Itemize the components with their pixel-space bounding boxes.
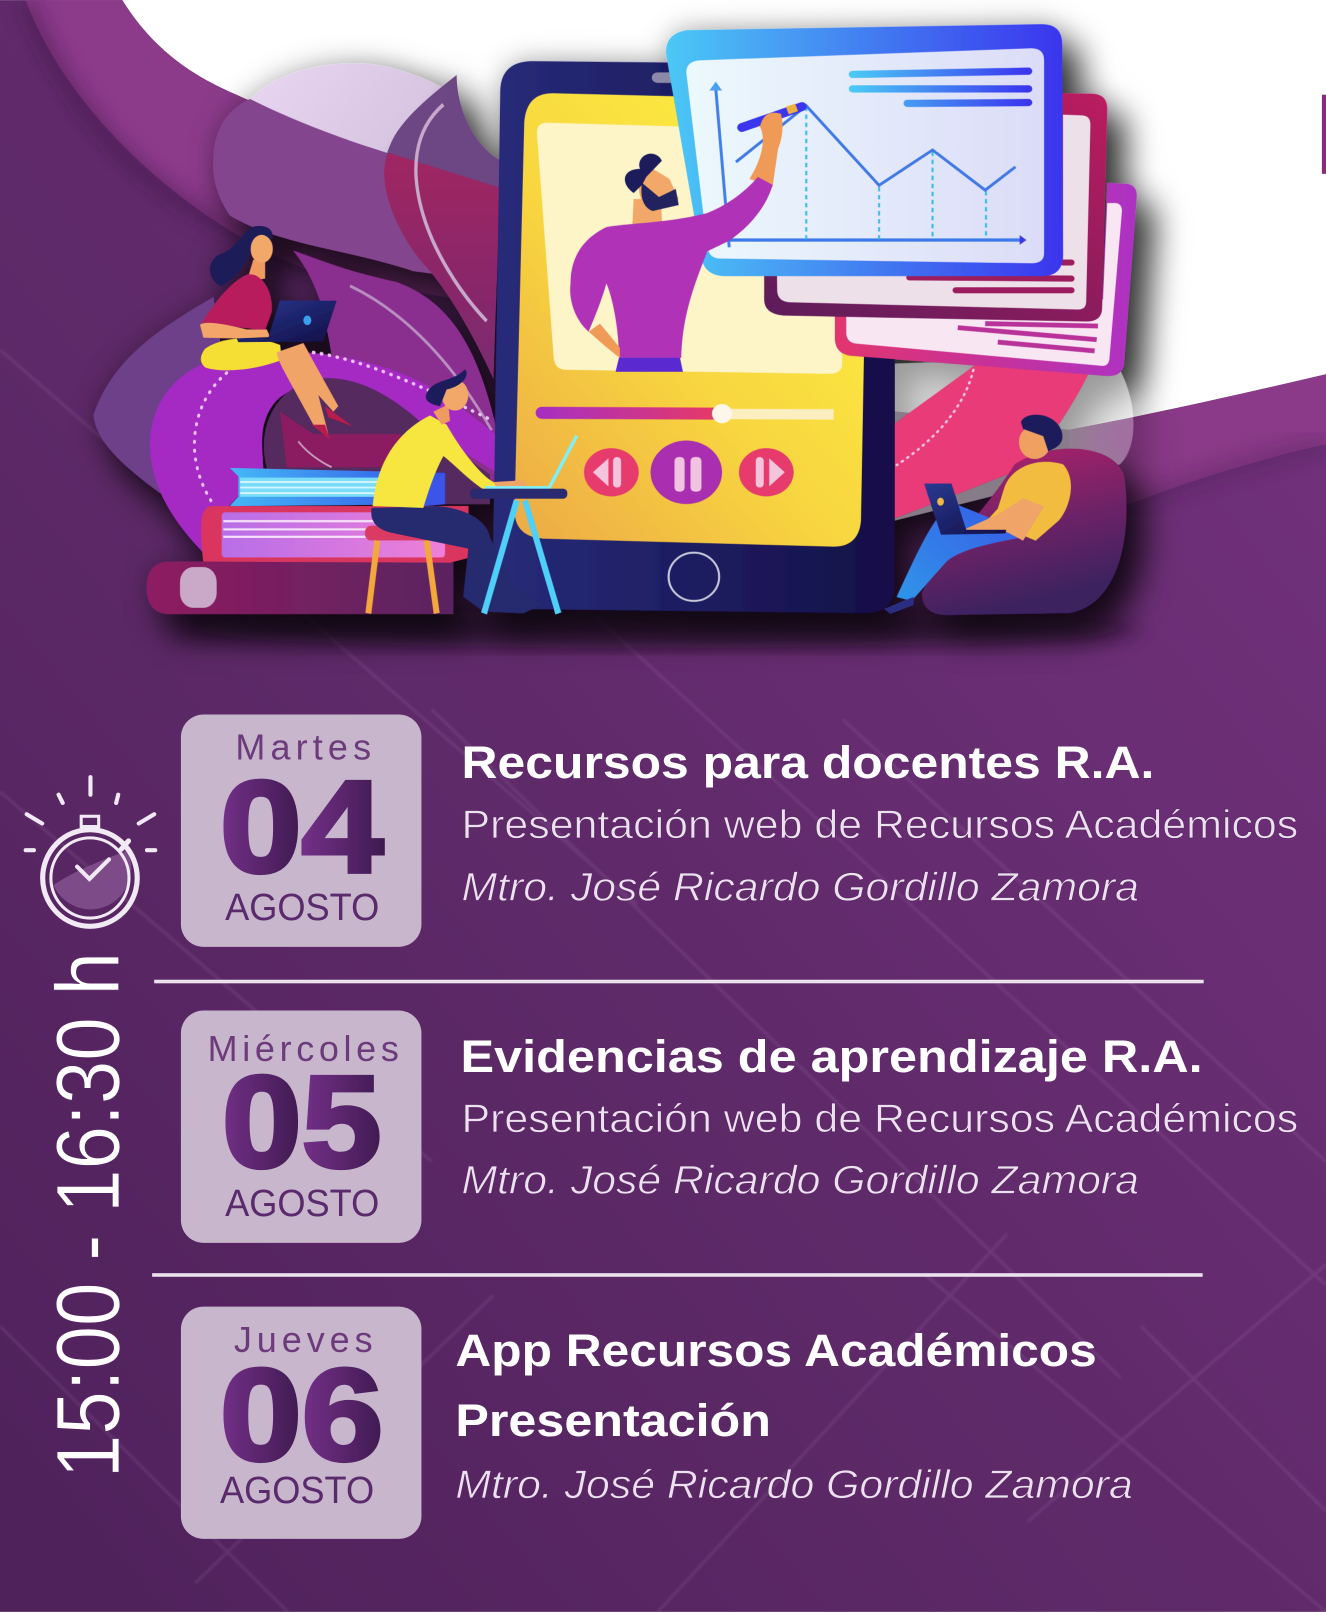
blue chart slide (666, 24, 1063, 276)
hand (493, 480, 527, 488)
session 2: date card: AGOSTO (225, 1183, 379, 1225)
top book (230, 468, 445, 506)
marker pen (742, 107, 802, 127)
session 1: date card: AGOSTO (225, 887, 379, 929)
background leaves and shapes (93, 63, 500, 556)
backpack (423, 473, 445, 506)
seated man (365, 369, 543, 613)
woman legs (277, 343, 338, 434)
pants (371, 506, 543, 613)
clock hands (77, 859, 109, 879)
case rings (43, 830, 137, 926)
woman shoes (312, 406, 353, 439)
woman laptop (237, 301, 337, 342)
session 1: date card: 04 (220, 754, 383, 900)
right-hand pink swoosh (895, 356, 1133, 521)
phone screen (515, 93, 868, 547)
ground shadow under illustration (175, 611, 1141, 648)
phone (493, 61, 895, 613)
shoe (884, 597, 914, 614)
slide 2 (764, 93, 1107, 322)
session 1: text (462, 737, 1298, 910)
hero illustration: video lesson on phone (93, 24, 1137, 615)
session 3: text: Mtro. José Ricardo Gordillo Zamora (455, 1463, 1133, 1507)
presenter neck and face (632, 165, 679, 225)
presenter hand on hip (589, 324, 620, 358)
hair (426, 369, 467, 406)
pause button (651, 441, 722, 504)
woman face and neck (247, 256, 265, 282)
session 3: text: App Recursos Académicos (455, 1325, 1097, 1376)
session 2: text: Presentación web de Recursos Académicos (462, 1097, 1298, 1141)
session 3: date card (181, 1307, 421, 1539)
video panel (537, 123, 842, 374)
session 3: date card: Jueves (234, 1319, 373, 1360)
session 2: date card (181, 1011, 421, 1243)
neck and head (433, 404, 450, 425)
text lines on slide (853, 71, 1029, 103)
vertical time label: 15:00 - 16:30 h (38, 952, 139, 1478)
book stack and front figures (147, 226, 577, 614)
session 1: text: Recursos para docentes R.A. (462, 737, 1154, 788)
man on beanbag with laptop (884, 415, 1126, 615)
hair (1021, 415, 1062, 451)
arm (966, 498, 1044, 541)
slide 3 (835, 183, 1137, 376)
presenter arm (749, 113, 783, 187)
divider 1 (154, 980, 1204, 983)
phone speaker (652, 72, 677, 83)
divider 2 (152, 1273, 1203, 1277)
beanbag (922, 449, 1126, 615)
lower dial fill (53, 850, 131, 909)
session 1: text: Presentación web de Recursos Académicos (462, 803, 1298, 847)
session 2: text (461, 1031, 1298, 1203)
woman skirt (201, 338, 282, 370)
bottom book (147, 562, 453, 614)
woman hair (210, 226, 273, 286)
radiating ticks (26, 777, 155, 850)
laptop (924, 484, 1006, 535)
session 3: date card: AGOSTO (220, 1470, 374, 1512)
sweater (373, 415, 523, 508)
session 2: text: Evidencias de aprendizaje R.A. (461, 1031, 1203, 1082)
home button (669, 553, 719, 601)
session 1: date card (181, 715, 421, 947)
head (1019, 425, 1051, 459)
forward button (739, 448, 794, 496)
line chart (709, 82, 1026, 247)
middle book (201, 506, 468, 563)
woman top (202, 274, 272, 330)
stacked slides (666, 24, 1137, 376)
session 2: date card: 05 (222, 1049, 381, 1195)
session 1: text: Mtro. José Ricardo Gordillo Zamora (462, 866, 1139, 910)
session 2: text: Mtro. José Ricardo Gordillo Zamora (462, 1159, 1139, 1203)
legs (897, 492, 1025, 601)
woman on books with laptop (200, 226, 353, 439)
desk with laptop (470, 436, 577, 613)
session 2: date card: Miércoles (208, 1028, 399, 1069)
progress bar (542, 404, 834, 423)
session 3: text (455, 1325, 1133, 1507)
shirt (985, 462, 1071, 541)
presenter hair (625, 154, 662, 193)
session 1: date card: Martes (235, 727, 371, 768)
crown (81, 816, 99, 827)
presenter shirt (570, 177, 773, 358)
session 3: text: Presentación (455, 1395, 771, 1446)
stool (365, 526, 441, 613)
woman arm (200, 323, 270, 338)
presenter beard (641, 183, 679, 211)
stopwatch icon (26, 777, 155, 926)
side button (121, 841, 128, 849)
phone body (493, 61, 895, 613)
session 3: date card: 06 (220, 1342, 383, 1488)
presenter belt (616, 358, 683, 372)
rewind button (584, 448, 639, 496)
presenter figure (570, 113, 783, 372)
